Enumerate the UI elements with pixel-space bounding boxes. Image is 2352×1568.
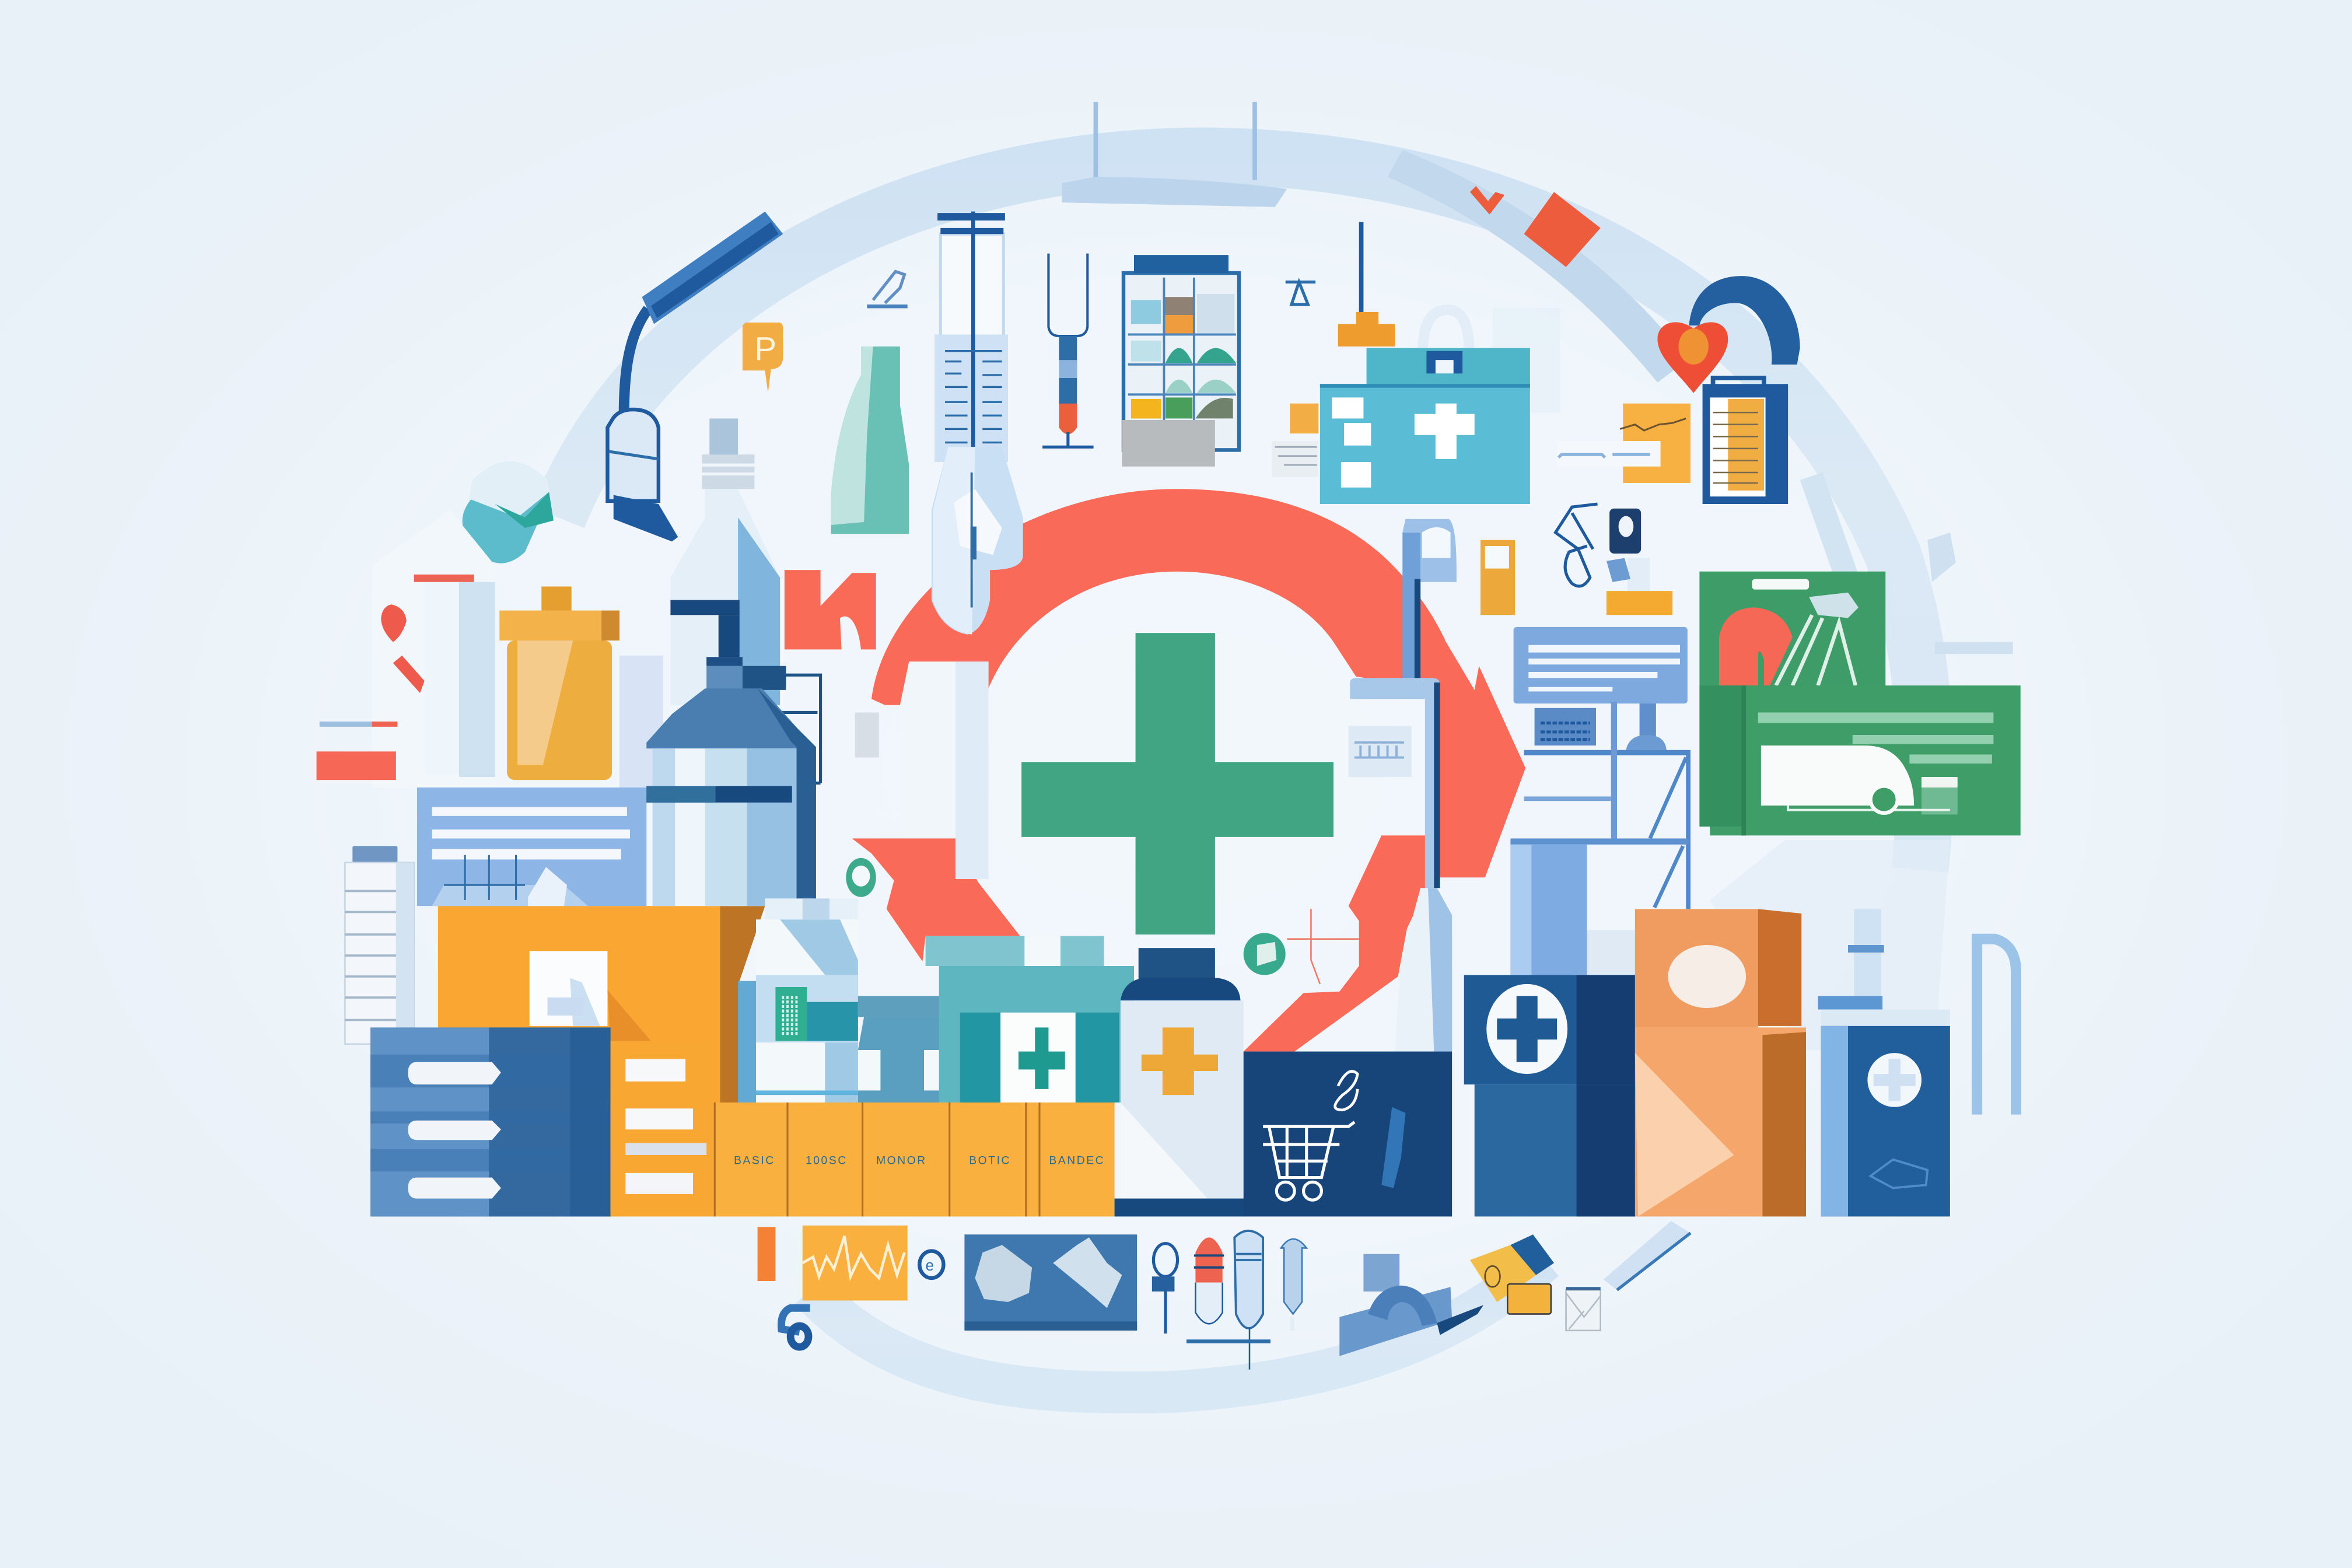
ladder bottle <box>345 846 414 1044</box>
medicine cabinet shelf <box>1122 255 1239 467</box>
hook icon <box>781 1308 810 1347</box>
row of orange cartons: BANDEC <box>1049 1154 1105 1167</box>
medicine bottle with green label <box>738 898 858 1102</box>
small notes beside kit <box>1272 404 1318 477</box>
navy drawer cabinet <box>370 1027 611 1216</box>
pale background ghost shapes <box>1418 304 1950 1050</box>
orange boxes stacked with face mask <box>1635 909 1806 1216</box>
red notched shape <box>785 570 876 649</box>
icon: triangle scale <box>1286 282 1315 304</box>
navy box with cart icon <box>1244 1052 1452 1216</box>
blue document <box>417 788 646 906</box>
green globe and red target <box>1244 909 1359 984</box>
blue U-shaped tube <box>1977 939 2016 1115</box>
pale panel with red capsules <box>372 510 495 788</box>
red label strip <box>317 722 397 780</box>
big orange cardboard box <box>438 906 765 1102</box>
pale lilac column <box>620 656 663 788</box>
monitor on scaffold <box>1510 627 1690 975</box>
icon: P tag: P <box>754 330 776 367</box>
row of orange cartons: MONOR <box>876 1154 927 1167</box>
clear plastic bottle <box>670 418 780 705</box>
row of orange cartons <box>714 1102 1115 1216</box>
row of orange cartons: BOTIC <box>969 1154 1011 1167</box>
icon: blue hook and heart <box>1657 276 1800 393</box>
antenna with orange block <box>1338 222 1395 346</box>
white jug with orange cross <box>1115 948 1245 1216</box>
small teal funnel box <box>858 996 948 1102</box>
blue lamp device <box>1339 1254 1483 1356</box>
orange jar <box>499 586 620 780</box>
orange strip marker <box>758 1227 775 1281</box>
first aid kit teal <box>1320 348 1530 504</box>
navy bottle with pump <box>646 600 821 906</box>
icon: teal oxygen mask <box>463 461 554 564</box>
medical pump column <box>1349 519 1457 1052</box>
green panel with ambulance <box>1699 685 2021 835</box>
yellow tag and phone <box>1470 1234 1554 1314</box>
teal glass bottle <box>831 346 909 534</box>
blue column <box>1510 845 1587 975</box>
IV fluid bag <box>932 447 1023 635</box>
icon: orange chart note <box>1557 404 1690 483</box>
teal kit box <box>926 936 1134 1102</box>
icon: tuning pipette <box>1042 254 1094 449</box>
upper right belt with red labels <box>1388 150 1688 383</box>
pen icon <box>1604 1221 1690 1290</box>
circular background ring <box>558 156 1925 1392</box>
blue bottle box <box>1818 909 1950 1216</box>
ring icon: e <box>926 1258 934 1274</box>
navy medical box with cross <box>1464 975 1635 1216</box>
green central cross <box>1021 633 1334 935</box>
red test tube <box>1194 1237 1224 1324</box>
x-ray card <box>964 1234 1137 1331</box>
top hanging rail <box>1062 102 1287 207</box>
orange vial <box>1480 540 1515 615</box>
waveform card <box>803 1226 908 1300</box>
icon: clipboard <box>1703 378 1788 504</box>
icon: dark camera and orange block <box>1606 509 1672 615</box>
blue test tube on stand <box>1186 1231 1270 1370</box>
white tall bottle left of cross <box>855 662 989 879</box>
small orange box <box>611 1041 714 1216</box>
small green globe left <box>846 858 876 897</box>
icon: P tag <box>743 323 783 393</box>
envelope icon <box>1566 1287 1601 1331</box>
icon: goggles <box>1556 504 1598 586</box>
green folder with tools <box>1699 572 1885 827</box>
stethoscope test tube icon <box>1152 1244 1178 1334</box>
red ring around cross <box>852 489 1525 1052</box>
row of orange cartons: BASIC <box>734 1154 775 1167</box>
ring icon <box>919 1251 943 1278</box>
syringe tube <box>935 212 1008 462</box>
small syringe <box>1281 1239 1307 1331</box>
row of orange cartons: 100SC <box>806 1154 848 1167</box>
small right side bracket <box>1927 533 2013 654</box>
lamp arm scanner <box>607 212 783 541</box>
icon: small triangle tool <box>867 271 908 308</box>
